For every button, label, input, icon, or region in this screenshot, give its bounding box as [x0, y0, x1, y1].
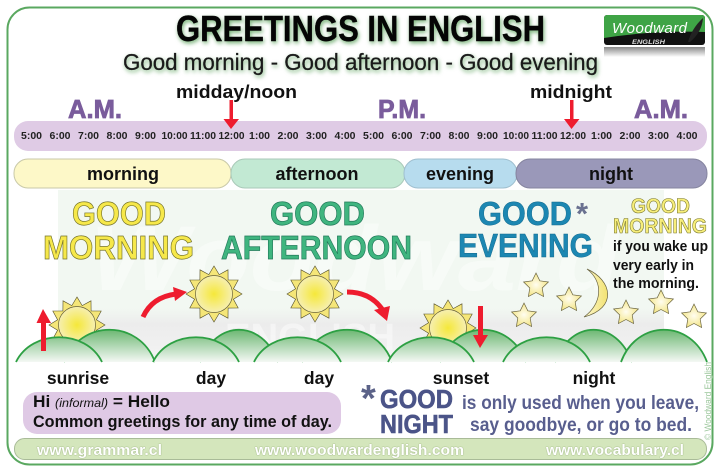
- greeting: good morning: MORNING: [43, 229, 194, 266]
- timeline bar: 9:00: [135, 130, 156, 142]
- greeting: good evening: [458, 195, 593, 264]
- timeline bar: 5:00: [21, 130, 42, 142]
- icon: sunrise sun: [49, 297, 105, 353]
- asterisk: evening note: *: [576, 196, 589, 231]
- panel: informal greeting: Hi (informal) = Hello: [33, 393, 170, 411]
- timeline bar: 10:00: [503, 130, 529, 142]
- period: afternoon: [231, 159, 405, 188]
- icon: sunset sun: [420, 300, 476, 356]
- panel: informal greeting: Common greetings for any time of day.: [33, 413, 332, 431]
- period: evening: [404, 159, 517, 188]
- timeline bar: 12:00: [218, 130, 245, 142]
- timeline bar: 4:00: [334, 130, 356, 142]
- panel: informal greeting: [23, 392, 341, 434]
- heading: good night: GOOD: [380, 384, 453, 414]
- timeline bar: 11:00: [532, 130, 558, 142]
- timeline bar: 5:00: [363, 130, 384, 142]
- footer bar: www.vocabulary.cl: [545, 442, 684, 459]
- timeline bar: 8:00: [448, 130, 470, 142]
- icon: moon: [584, 269, 608, 317]
- greeting: good morning early: GOOD: [631, 195, 690, 218]
- timeline bar: 2:00: [619, 130, 641, 142]
- timeline bar: [14, 121, 707, 151]
- note: wake up early: if you wake up: [613, 239, 708, 255]
- subtitle: Good morning - Good afternoon - Good evening: [123, 49, 598, 75]
- timeline bar: 7:00: [420, 130, 441, 142]
- label: night: night: [573, 368, 616, 388]
- footer bar: [14, 438, 706, 460]
- logo: Woodward English: Woodward: [612, 20, 688, 37]
- note: wake up early: the morning.: [613, 276, 699, 292]
- logo: Woodward English: [604, 15, 705, 57]
- panel: illustration background: Woodward: [90, 208, 622, 310]
- greeting: good afternoon: GOOD: [270, 195, 365, 232]
- label: midday/noon: midday/noon: [176, 82, 297, 102]
- hills: [16, 330, 707, 362]
- timeline bar: 11:00: [190, 130, 216, 142]
- footer bar: www.woodwardenglish.com: [254, 442, 464, 459]
- greeting: good morning: GOOD: [72, 195, 166, 232]
- panel: illustration background: [58, 190, 664, 362]
- period: afternoon: afternoon: [276, 164, 358, 184]
- timeline bar: 6:00: [391, 130, 413, 142]
- timeline bar: 2:00: [277, 130, 299, 142]
- label: A.M. right: A.M.: [634, 94, 688, 124]
- label: sunset: sunset: [433, 368, 489, 388]
- timeline bar: 4:00: [676, 130, 698, 142]
- heading: good night: NIGHT: [380, 409, 453, 439]
- arrow: morning rising curve: [143, 287, 187, 317]
- text: good night usage: is only used when you leave,: [462, 393, 699, 414]
- timeline bar: 10:00: [162, 130, 188, 142]
- icon: day sun right: [287, 266, 343, 322]
- arrow: midnight: [564, 100, 580, 129]
- heading: good night: [380, 384, 453, 439]
- timeline bar: 1:00: [249, 130, 270, 142]
- timeline bar: 1:00: [591, 130, 612, 142]
- timeline bar: 12:00: [560, 130, 586, 142]
- label: P.M.: P.M.: [378, 94, 426, 124]
- timeline bar: 8:00: [106, 130, 128, 142]
- label: day left: day: [196, 368, 226, 388]
- note: wake up early: [613, 239, 708, 292]
- greeting: good evening: EVENING: [458, 227, 593, 264]
- arrow: sunset down: [473, 306, 488, 348]
- arrow: noon: [224, 100, 239, 129]
- title: GREETINGS IN ENGLISH: [176, 8, 545, 49]
- period: evening: evening: [426, 164, 494, 184]
- label: A.M. left: A.M.: [68, 94, 122, 124]
- label: sunrise: sunrise: [47, 368, 109, 388]
- greeting: good evening: GOOD: [478, 195, 572, 232]
- greeting: good afternoon: [221, 195, 412, 266]
- arrow: sunrise up: [36, 309, 51, 351]
- greeting: good morning: [43, 195, 194, 266]
- label: day right: day: [304, 368, 334, 388]
- timeline bar: 9:00: [477, 130, 498, 142]
- timeline bar: 3:00: [648, 130, 669, 142]
- greeting: good morning early: [613, 195, 707, 238]
- icons: stars: [512, 273, 706, 328]
- text: good night usage: [462, 393, 699, 436]
- text: good night usage: say goodbye, or go to bed.: [470, 415, 692, 436]
- timeline bar: 6:00: [49, 130, 71, 142]
- greeting: good afternoon: AFTERNOON: [221, 229, 412, 266]
- label: midnight: midnight: [530, 82, 612, 102]
- footer bar: www.grammar.cl: [36, 442, 162, 459]
- arrow: afternoon falling curve: [347, 292, 390, 321]
- period: morning: morning: [87, 164, 159, 184]
- asterisk: good night note: *: [361, 378, 376, 420]
- note: wake up early: very early in: [613, 258, 694, 274]
- logo: Woodward English: ENGLISH: [632, 39, 665, 46]
- period: night: [516, 159, 707, 188]
- copyright vertical: © Woodward English: [703, 362, 714, 440]
- panel: illustration background: ENGLISH: [225, 317, 395, 359]
- timeline bar: 3:00: [306, 130, 327, 142]
- icon: day sun left: [186, 266, 242, 322]
- timeline bar: 7:00: [78, 130, 99, 142]
- period: night: night: [589, 164, 633, 184]
- greeting: good morning early: MORNING: [613, 215, 707, 238]
- period: morning: [14, 159, 231, 188]
